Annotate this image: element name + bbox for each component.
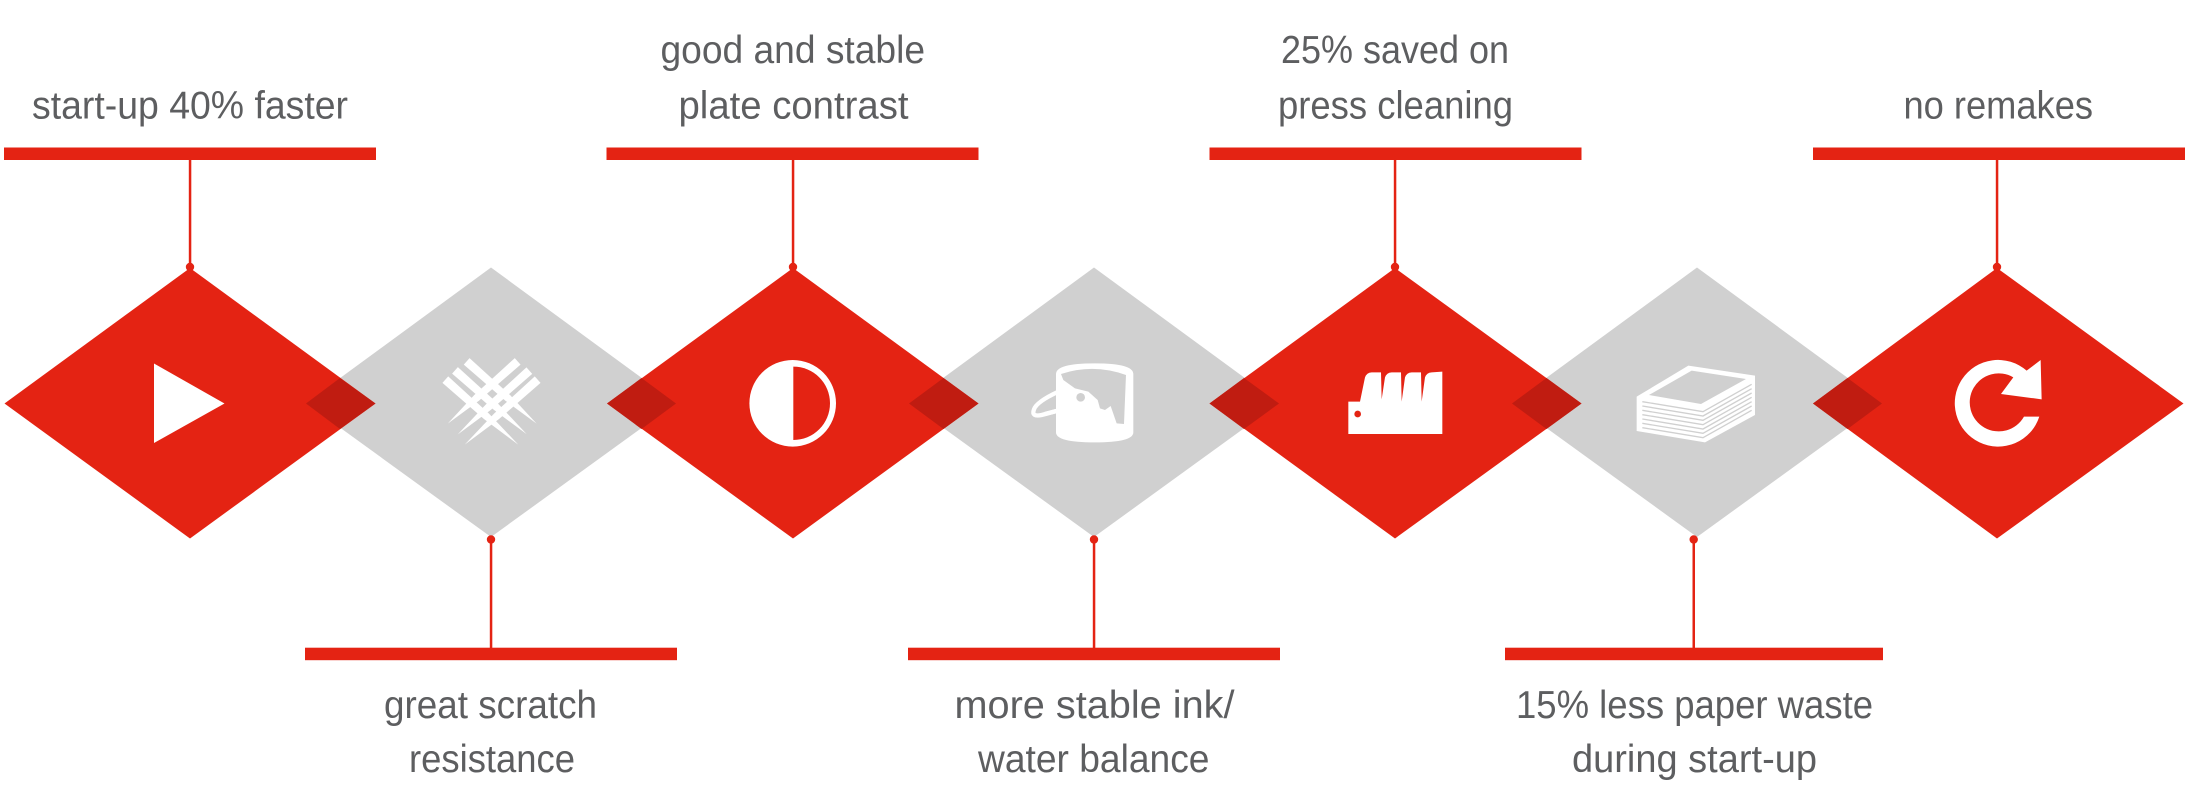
callout: start-up 40% faster: start-up 40% faster [32, 84, 348, 128]
callout: 25% saved on press cleaning: press cleaning [1278, 84, 1513, 128]
overlap 5 [1512, 378, 1582, 429]
callout: great scratch resistance: great scratch [384, 684, 597, 727]
callout: good and stable plate contrast: plate contrast [678, 84, 909, 128]
diamond: paper waste grey [1512, 268, 1882, 537]
callout: no remakes: no remakes [1904, 84, 2093, 128]
icon: scratches [442, 358, 541, 448]
callout: more stable ink/water balance: more stable ink/ [954, 684, 1235, 727]
callout: start-up 40% faster [4, 84, 376, 271]
callout: great scratch resistance [305, 535, 677, 781]
callout: 25% saved on press cleaning: 25% saved on [1281, 29, 1509, 72]
callout: 25% saved on press cleaning [1210, 29, 1582, 271]
callout: 15% less paper waste during start-up: 15% less paper waste [1516, 684, 1873, 727]
overlap 1 [306, 378, 376, 429]
callout: more stable ink/water balance [908, 535, 1280, 781]
overlap 6 [1813, 378, 1882, 429]
icon: printing press [1348, 372, 1442, 434]
icon: refresh arrow [1955, 360, 2042, 447]
diamond: scratch resistance grey [306, 268, 676, 537]
callout: great scratch resistance: resistance [409, 738, 575, 781]
diamond: ink balance grey [909, 268, 1279, 537]
icon: half circle contrast [749, 360, 836, 447]
callout: good and stable plate contrast: good and stable [660, 29, 925, 72]
icon: play triangle [154, 364, 224, 443]
diamond: start-up red [4, 268, 376, 538]
icon: ink bucket [1033, 363, 1133, 442]
callout: 15% less paper waste during start-up [1505, 535, 1883, 781]
overlap 4 [1210, 378, 1279, 429]
overlap 2 [607, 378, 676, 429]
callout: good and stable plate contrast [606, 29, 978, 271]
callout: more stable ink/water balance: water balance [977, 738, 1210, 781]
icon: paper stack [1637, 366, 1755, 442]
overlap 3 [909, 378, 978, 429]
diamond: plate contrast red [607, 268, 978, 538]
callout: no remakes [1813, 84, 2185, 271]
diamond: press cleaning red [1210, 268, 1582, 538]
diamond chain [4, 268, 2184, 538]
diamond: no remakes red [1813, 268, 2184, 538]
callout: 15% less paper waste during start-up: during start-up [1572, 738, 1817, 781]
